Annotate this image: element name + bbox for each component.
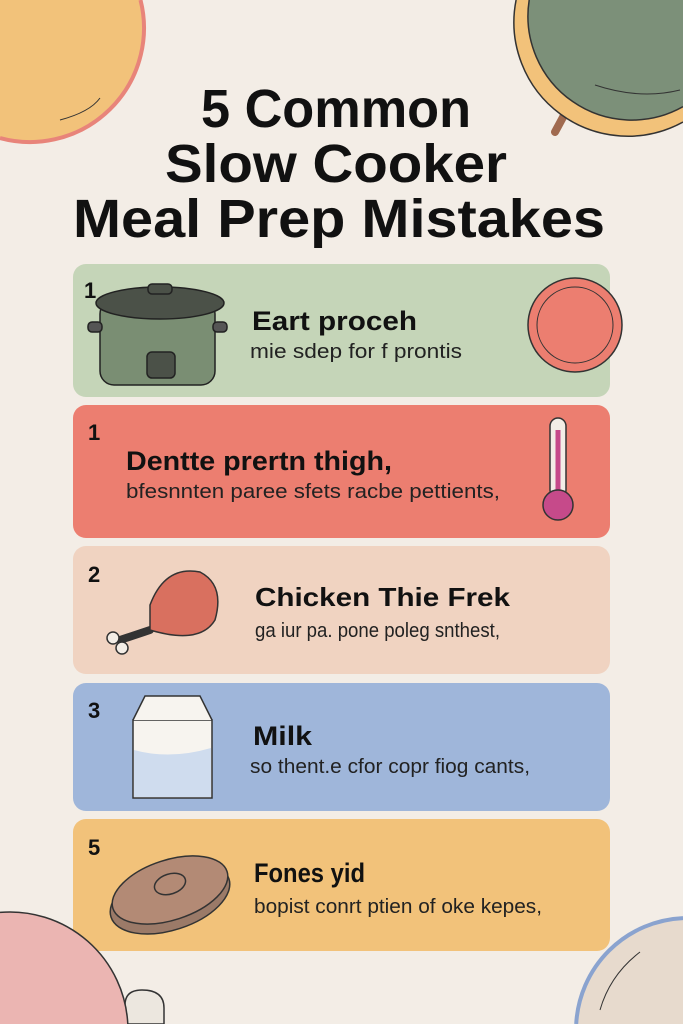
icon: red plate [528, 278, 622, 372]
icon: slow cooker [88, 284, 227, 385]
decoration: yellow plate top-left [0, 0, 144, 142]
panel 2: thermometer [73, 405, 610, 538]
panel 1: slow cooker [73, 264, 622, 397]
panel 5: lid: Fones yid [254, 858, 365, 888]
title: 5 Common [201, 79, 471, 139]
title: Meal Prep Mistakes [73, 189, 605, 249]
panel 2: thermometer: bfesnnten paree sfets racbe pettients, [126, 481, 500, 503]
panel 4: milk [73, 683, 610, 811]
panel 4: milk: Milk [253, 721, 313, 751]
panel 2: thermometer: 1 [88, 420, 100, 445]
icon: thermometer [543, 418, 573, 520]
panel 5: lid: 5 [88, 835, 100, 860]
panel 2: thermometer: Dentte prertn thigh, [126, 446, 392, 476]
panel 3: chicken [73, 546, 610, 674]
panel 1: slow cooker: Eart proceh [252, 306, 417, 336]
icon: brown lid [101, 843, 239, 948]
panel 4: milk: 3 [88, 698, 100, 723]
title [73, 79, 605, 249]
panel 3: chicken: ga iur pa. pone poleg snthest, [255, 620, 500, 642]
decoration: beige bowl bottom-right [576, 918, 683, 1024]
icon: milk carton [133, 696, 212, 798]
panel 5: lid: bopist conrt ptien of oke kepes, [254, 896, 542, 918]
decoration: pink bowl bottom-left [0, 912, 164, 1024]
panel 1: slow cooker: 1 [84, 278, 96, 303]
title: Slow Cooker [165, 134, 507, 194]
icon: chicken leg [107, 571, 218, 654]
panel 4: milk: so thent.e cfor copr fiog cants, [250, 756, 530, 778]
panel 5: lid [73, 819, 610, 951]
panel 3: chicken: Chicken Thie Frek [255, 582, 511, 612]
panel 3: chicken: 2 [88, 562, 100, 587]
decoration: green pan top-right [514, 0, 683, 136]
panel 1: slow cooker: mie sdep for f prontis [250, 341, 462, 363]
